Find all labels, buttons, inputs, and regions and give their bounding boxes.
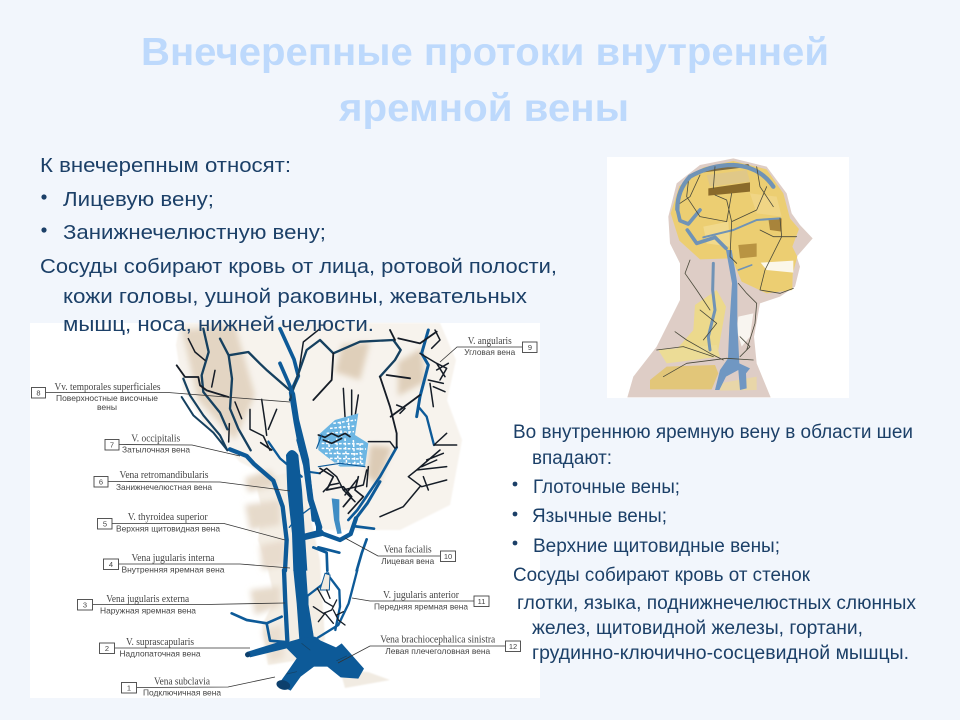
label 5: superior thyroid vein: Верхняя щитовидная вена: [116, 524, 220, 534]
label 3: external jugular vein: [78, 594, 196, 616]
text block: left description: [40, 154, 557, 336]
text block: right description: Язычные вены;: [532, 506, 667, 527]
label 1: subclavian vein: [122, 677, 221, 698]
label 6: retromandibular vein: [94, 470, 212, 492]
label 7: occipital vein: Затылочная вена: [122, 445, 190, 455]
label 2: suprascapular vein: [100, 637, 201, 659]
text block: right description: глотки, языка, поднижнечелюстных слюнных: [517, 593, 916, 614]
label 2: suprascapular vein: 2: [105, 644, 109, 653]
icon: cut skull slab: [708, 182, 750, 196]
label 2: suprascapular vein: V. suprascapularis: [126, 637, 194, 648]
text block: left description: кожи головы, ушной раковины, жевательных: [63, 285, 528, 308]
panel: extracranial veins diagram: [30, 323, 540, 698]
text block: left description: Сосуды собирают кровь от лица, ротовой полости,: [40, 255, 557, 278]
icon: cervical spine: [677, 290, 726, 350]
label 6: retromandibular vein: Занижнечелюстная вена: [116, 482, 212, 492]
label 9: angular vein: [464, 336, 537, 357]
label 4: internal jugular vein: [104, 553, 225, 575]
text block: left description: К внечерепным относят:: [40, 154, 291, 177]
label 1: subclavian vein: Vena subclavia: [154, 677, 211, 688]
label 8: superficial temporal veins: Поверхностные височные: [56, 393, 158, 403]
brachiocephalic confluence: [232, 570, 364, 691]
label 4: internal jugular vein: 4: [109, 560, 113, 569]
label 6: retromandibular vein: 6: [99, 478, 103, 486]
text block: right description: впадают:: [532, 448, 612, 469]
temporal and occipital veins: [177, 329, 320, 450]
label 12: left brachiocephalic vein: 12: [509, 642, 517, 651]
label 9: angular vein: 9: [528, 343, 532, 352]
label 9: angular vein: Угловая вена: [464, 347, 515, 357]
text block: left description: Лицевую вену;: [63, 188, 214, 211]
label 5: superior thyroid vein: V. thyroidea superior: [128, 512, 208, 523]
label 9: angular vein: V. angularis: [468, 336, 512, 347]
label 3: external jugular vein: Vena jugularis externa: [106, 594, 190, 605]
label 12: left brachiocephalic vein: [380, 635, 520, 656]
label 11: anterior jugular vein: [374, 590, 489, 611]
icon: internal jugular vein: [715, 250, 750, 390]
text block: right description: Во внутреннюю яремную вену в области шеи: [513, 422, 913, 443]
panel: head and neck veins illustration: [607, 157, 849, 398]
text block: right description: грудинно-ключично-сосцевидной мышцы.: [532, 643, 909, 664]
label 8: superficial temporal veins: 8: [36, 388, 41, 398]
label 1: subclavian vein: 1: [127, 684, 131, 692]
facial vein network: [280, 330, 457, 520]
text block: left description: мышц, носа, нижней челюсти.: [63, 313, 374, 336]
label 8: superficial temporal veins: вены: [97, 402, 117, 412]
label 3: external jugular vein: Наружная яремная вена: [100, 606, 196, 616]
title: [141, 31, 829, 130]
label 4: internal jugular vein: Внутренняя яремная вена: [122, 565, 225, 575]
icon: head silhouette skin: [627, 158, 813, 397]
label 10: facial vein: Vena facialis: [384, 545, 432, 556]
text block: right description: Верхние щитовидные вены;: [533, 536, 780, 557]
skull and spine bones: [176, 323, 462, 688]
label 5: superior thyroid vein: [98, 512, 220, 534]
label 12: left brachiocephalic vein: Vena brachiocephalica sinistra: [380, 635, 496, 646]
icon: skull: [671, 161, 799, 293]
label 7: occipital vein: [105, 434, 190, 455]
label 11: anterior jugular vein: V. jugularis anterior: [383, 590, 460, 601]
title: яремной вены: [338, 87, 629, 130]
parotid plexus: [317, 413, 368, 467]
label 4: internal jugular vein: Vena jugularis interna: [132, 553, 215, 564]
icon: teeth: [761, 261, 793, 273]
leader lines: [46, 347, 522, 688]
label 2: suprascapular vein: Надлопаточная вена: [120, 649, 201, 659]
label 6: retromandibular vein: Vena retromandibularis: [120, 470, 209, 481]
text block: right description: Сосуды собирают кровь от стенок: [513, 565, 811, 586]
label 7: occipital vein: V. occipitalis: [131, 434, 180, 445]
label 11: anterior jugular vein: 11: [478, 597, 485, 606]
veins of the neck: [230, 440, 380, 571]
label 5: superior thyroid vein: 5: [103, 520, 107, 528]
text block: left description: Занижнечелюстную вену;: [63, 221, 326, 244]
icon: clavicle and ribs: [650, 365, 718, 389]
label 3: external jugular vein: 3: [83, 600, 87, 610]
label 7: occipital vein: 7: [110, 440, 114, 450]
label 10: facial vein: [381, 545, 456, 566]
text block: right description: Глоточные вены;: [533, 477, 680, 498]
label 11: anterior jugular vein: Передняя яремная вена: [374, 601, 468, 611]
label 8: superficial temporal veins: [32, 382, 161, 412]
title: Внечерепные протоки внутренней: [141, 31, 829, 74]
label 10: facial vein: 10: [444, 552, 452, 561]
label 1: subclavian vein: Подключичная вена: [143, 688, 221, 698]
label 12: left brachiocephalic vein: Левая плечеголовная вена: [385, 646, 490, 656]
text block: right description: [513, 422, 916, 664]
text block: right description: желез, щитовидной железы, гортани,: [532, 618, 863, 639]
label 8: superficial temporal veins: Vv. temporales superficiales: [54, 382, 161, 393]
label 10: facial vein: Лицевая вена: [381, 556, 434, 566]
